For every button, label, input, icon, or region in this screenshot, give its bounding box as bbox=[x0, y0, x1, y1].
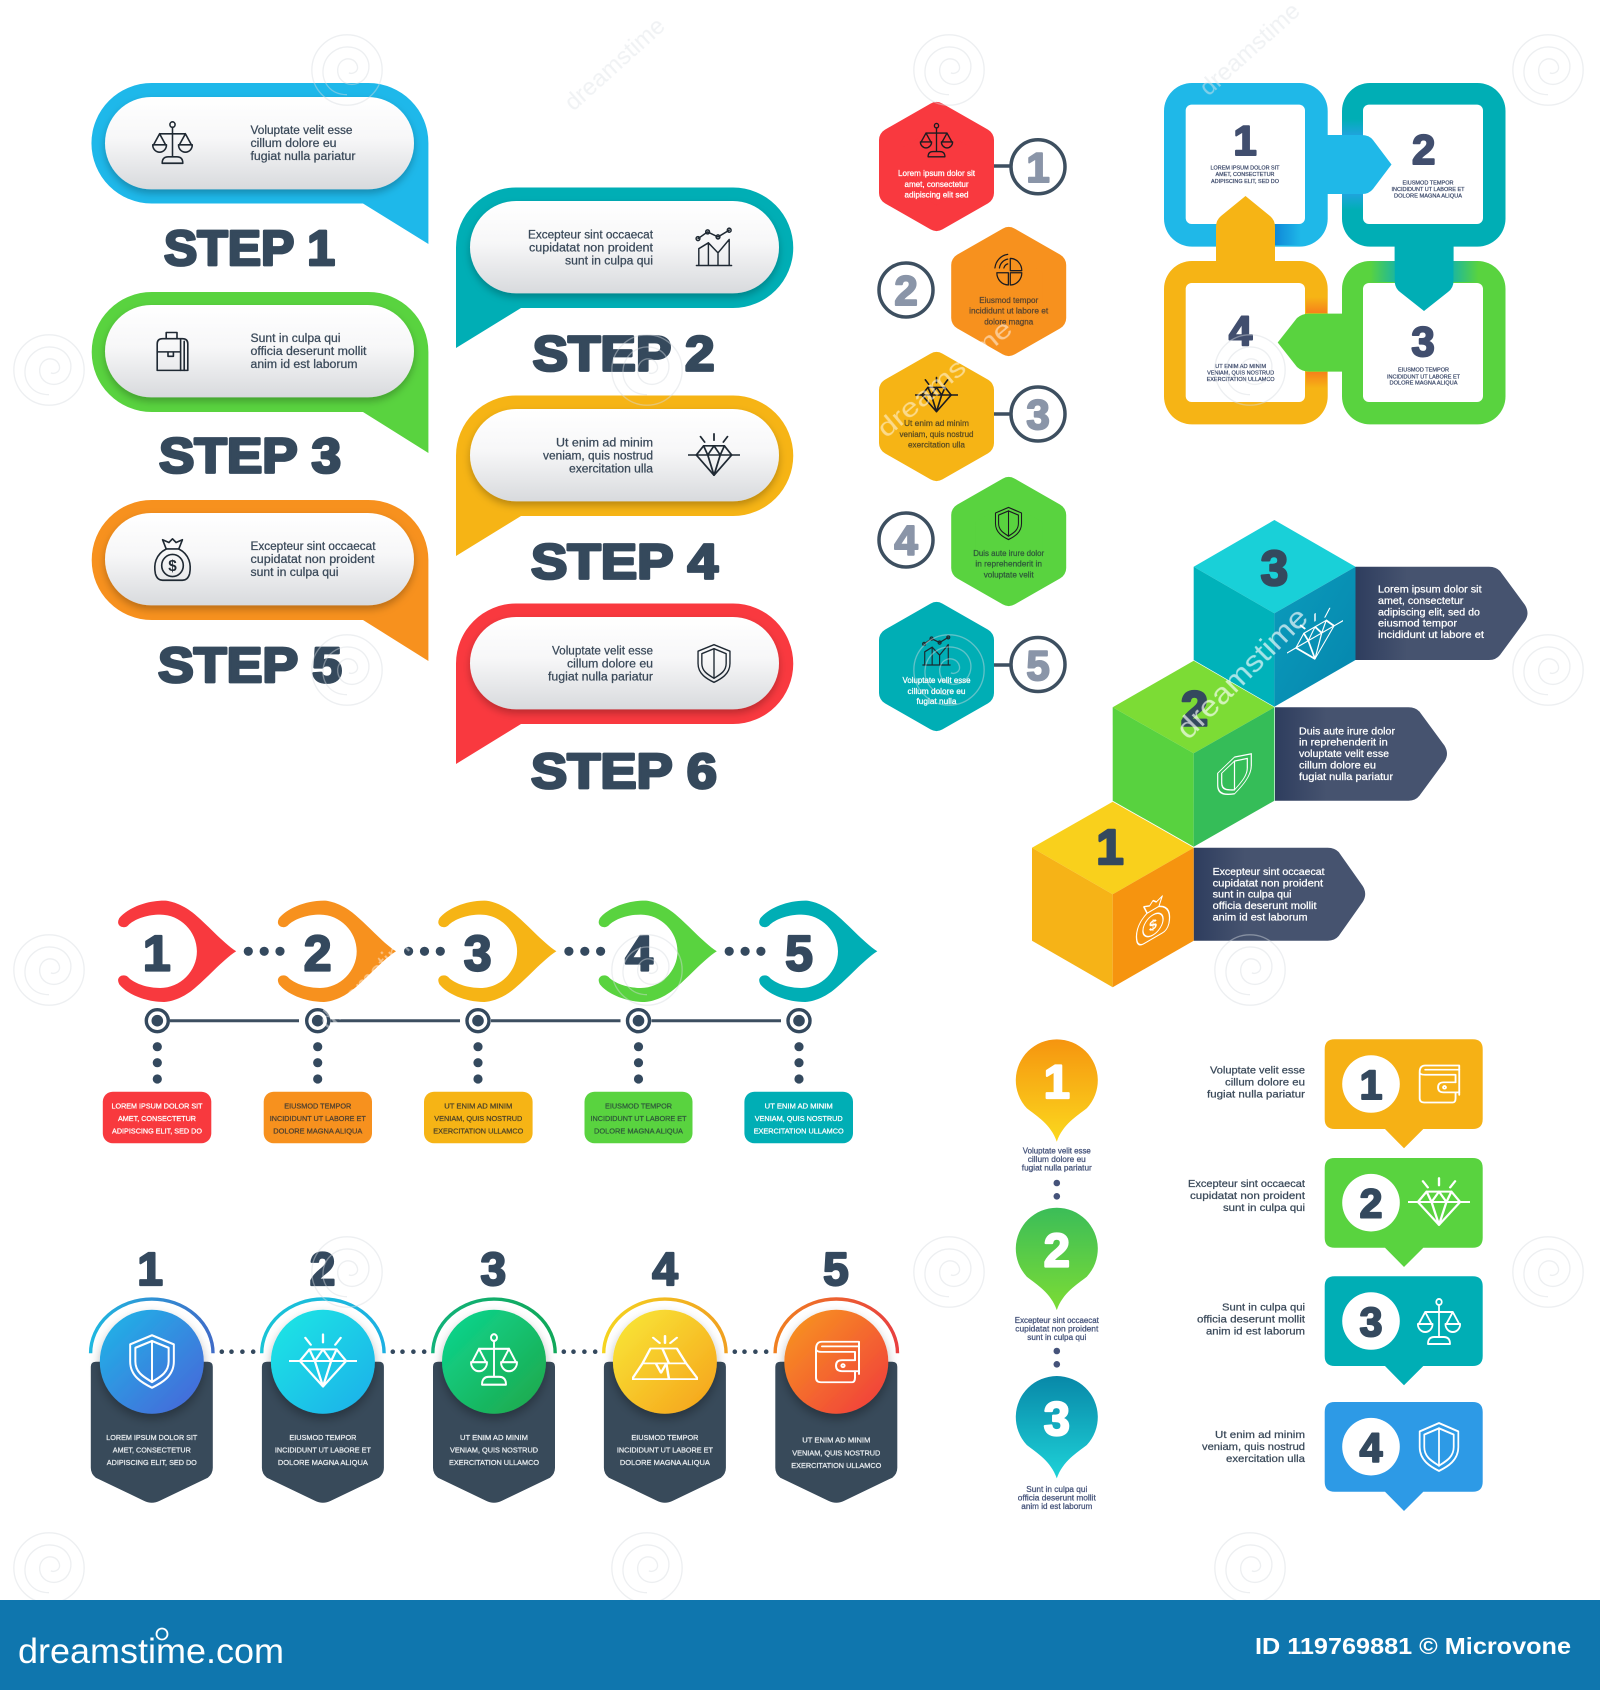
pointer numbers: 4 bbox=[625, 926, 653, 982]
icon: gem bbox=[1408, 1178, 1470, 1225]
text: card 5: VENIAM, QUIS NOSTRUD bbox=[792, 1448, 881, 1457]
icon: scales bbox=[153, 122, 192, 163]
numbers in squares: 4 bbox=[1229, 308, 1253, 354]
pin 2: 2 bbox=[1044, 1224, 1070, 1276]
text: callout 1 bbox=[1207, 1065, 1306, 1100]
pointer 2 bbox=[278, 901, 396, 1002]
footer bar bbox=[0, 1600, 1600, 1690]
hexagon 2 bbox=[963, 239, 1054, 344]
text: card 2: EIUSMOD TEMPOR bbox=[289, 1433, 357, 1442]
ring numbers: 1 bbox=[1026, 144, 1050, 191]
text: hexagon 4: voluptate velit bbox=[984, 570, 1034, 579]
ring numbers: 3 bbox=[1026, 391, 1050, 438]
text: hexagon 3: veniam, quis nostrud bbox=[900, 430, 974, 439]
card 3 bbox=[433, 1299, 555, 1503]
pointer numbers: 5 bbox=[785, 926, 813, 982]
text: square 2: EIUSMOD TEMPOR bbox=[1402, 180, 1454, 186]
timeline box 5: EXERCITATION ULLAMCO bbox=[754, 1126, 844, 1135]
cube 1 bbox=[1032, 802, 1194, 987]
heading: step 2: STEP 2 bbox=[533, 328, 715, 382]
timeline box 2: INCIDIDUNT UT LABORE ET bbox=[270, 1114, 366, 1123]
hexagon 5 bbox=[891, 614, 982, 719]
text: square 1: LOREM IPSUM DOLOR SIT bbox=[1210, 166, 1280, 172]
text: pin 1: Voluptate velit esse bbox=[1023, 1146, 1091, 1155]
text: cube 1 label: officia deserunt mollit bbox=[1213, 900, 1317, 912]
timeline box 4: INCIDIDUNT UT LABORE ET bbox=[590, 1114, 687, 1123]
icon: pie chart bbox=[995, 254, 1022, 285]
pin dots bbox=[1054, 1180, 1060, 1368]
text: callout 1: Voluptate velit esse bbox=[1210, 1065, 1305, 1076]
text: step 5 description: Excepteur sint occaecat bbox=[250, 541, 376, 553]
arrow: yellow to square 1 bbox=[1216, 196, 1275, 261]
timeline box 5: VENIAM, QUIS NOSTRUD bbox=[755, 1114, 843, 1123]
text: card 3: UT ENIM AD MINIM bbox=[460, 1433, 528, 1442]
text: callout 3: anim id est laborum bbox=[1206, 1326, 1305, 1337]
timeline box 2: DOLORE MAGNA ALIQUA bbox=[273, 1126, 362, 1135]
text: card 3: VENIAM, QUIS NOSTRUD bbox=[450, 1446, 539, 1455]
text: step 1 description: cillum dolore eu bbox=[250, 138, 336, 150]
text: card 2: INCIDIDUNT UT LABORE ET bbox=[275, 1446, 371, 1455]
watermark text: dreamstime bbox=[1170, 601, 1315, 746]
square frame 1 bbox=[1164, 83, 1328, 247]
pin 3: 3 bbox=[1044, 1392, 1070, 1445]
watermark text: dreamstime bbox=[559, 12, 671, 116]
text: step 5 description: sunt in culpa qui bbox=[250, 567, 338, 579]
text: hexagon 1: Lorem ipsum dolor sit bbox=[898, 169, 976, 178]
card 4 bbox=[604, 1299, 726, 1503]
text: cube 2 label: in reprehenderit in bbox=[1299, 737, 1388, 749]
text: card 3 bbox=[449, 1433, 539, 1467]
icon: shield bbox=[995, 507, 1022, 540]
hexagon 4 bbox=[963, 489, 1054, 594]
icon: shield bbox=[1420, 1423, 1458, 1471]
watermark text: dreamstime bbox=[1194, 0, 1306, 101]
text: square 3: INCIDIDUNT UT LABORE ET bbox=[1387, 374, 1460, 380]
pointer 3 bbox=[438, 901, 556, 1002]
text: card 4 bbox=[617, 1433, 713, 1467]
text: step 6 description: cillum dolore eu bbox=[567, 658, 653, 670]
text: cube 3 label: amet, consectetur bbox=[1378, 595, 1464, 607]
text: hexagon 5: Voluptate velit esse bbox=[902, 676, 971, 685]
text: hexagon 2 bbox=[969, 296, 1049, 326]
arrow: green to square 4 bbox=[1278, 314, 1342, 372]
text: card 1 bbox=[106, 1433, 198, 1467]
icon: gold bars bbox=[632, 1336, 698, 1379]
timeline line bbox=[170, 1019, 781, 1022]
text: callout 4: Ut enim ad minim bbox=[1215, 1430, 1305, 1441]
bubble: step 1 bbox=[91, 83, 428, 244]
pointer 1 bbox=[118, 901, 236, 1002]
text: callout 1: fugiat nulla pariatur bbox=[1207, 1089, 1306, 1100]
card numbers: 2 bbox=[310, 1243, 335, 1295]
text: hexagon 1: amet, consectetur bbox=[904, 180, 969, 189]
text: pin 2: sunt in culpa qui bbox=[1027, 1333, 1087, 1342]
pointer 5 bbox=[759, 901, 877, 1002]
heading: step 5: STEP 5 bbox=[158, 639, 342, 693]
panel: numbered timeline bbox=[103, 901, 877, 1143]
timeline nodes bbox=[146, 1010, 810, 1032]
text: hexagon 1 bbox=[898, 169, 976, 200]
text: hexagon 3: exercitation ulla bbox=[908, 440, 965, 450]
text: cube 1 label: anim id est laborum bbox=[1213, 911, 1308, 923]
bubble: step 2 bbox=[456, 188, 793, 348]
number 2: 2 bbox=[1181, 682, 1208, 736]
number 3: 3 bbox=[1261, 542, 1288, 596]
callout 3 bbox=[1325, 1276, 1483, 1385]
timeline box 3: EXERCITATION ULLAMCO bbox=[433, 1126, 523, 1135]
text: step 6 description: Voluptate velit esse bbox=[552, 646, 653, 658]
pointer 4 bbox=[599, 901, 717, 1002]
timeline box 3: VENIAM, QUIS NOSTRUD bbox=[434, 1114, 523, 1123]
numbers in squares: 3 bbox=[1411, 318, 1435, 365]
text: card 4: EIUSMOD TEMPOR bbox=[631, 1433, 699, 1442]
text: card 4: INCIDIDUNT UT LABORE ET bbox=[617, 1446, 713, 1455]
text: step 3 description: Sunt in culpa qui bbox=[250, 333, 340, 345]
icon: scales bbox=[471, 1334, 517, 1385]
arrow: blue to square 2 bbox=[1327, 135, 1392, 194]
text: pin 2 bbox=[1015, 1316, 1100, 1342]
text: card 5 bbox=[791, 1436, 881, 1470]
timeline box 2: EIUSMOD TEMPOR bbox=[284, 1102, 352, 1111]
text: hexagon 2: incididunt ut labore et bbox=[969, 307, 1049, 316]
callout 2: 2 bbox=[1360, 1181, 1382, 1227]
panel: isometric cube staircase bbox=[1032, 520, 1528, 987]
pin 2 bbox=[1016, 1208, 1098, 1310]
text: step 2 description: cupidatat non proident bbox=[529, 242, 654, 254]
text: pin 2: cupidatat non proident bbox=[1015, 1325, 1099, 1334]
card numbers: 5 bbox=[823, 1243, 849, 1295]
timeline box 1: LOREM IPSUM DOLOR SIT bbox=[112, 1102, 203, 1111]
pointer numbers bbox=[143, 926, 813, 982]
card 2 bbox=[262, 1299, 384, 1503]
text: step 4 description: veniam, quis nostrud bbox=[543, 450, 653, 462]
callout 4: 4 bbox=[1360, 1425, 1383, 1471]
icon: wallet bbox=[816, 1342, 859, 1382]
footer logo text: dreamstime.com bbox=[18, 1632, 284, 1671]
card numbers bbox=[137, 1243, 849, 1295]
text: card 5: UT ENIM AD MINIM bbox=[802, 1436, 870, 1445]
text: step 2 description: sunt in culpa qui bbox=[565, 256, 653, 268]
text: cube 1 label: Excepteur sint occaecat bbox=[1213, 866, 1325, 878]
text: callout 3: Sunt in culpa qui bbox=[1222, 1302, 1305, 1313]
callout 4 bbox=[1325, 1402, 1483, 1511]
frame shading near arrows bbox=[1275, 119, 1478, 388]
text: cube 2 label: voluptate velit esse bbox=[1299, 748, 1389, 760]
text: step 4 description: exercitation ulla bbox=[569, 464, 654, 476]
card numbers: 4 bbox=[652, 1243, 678, 1295]
text: hexagon 1: adipiscing elit sed bbox=[904, 190, 969, 200]
text: cube 2 label: Duis aute irure dolor bbox=[1299, 725, 1396, 737]
watermark text: dreamstime bbox=[312, 922, 425, 1035]
text: cube 2 label: fugiat nulla pariatur bbox=[1299, 771, 1394, 783]
timeline box 1 bbox=[103, 1092, 211, 1143]
heading: step 1: STEP 1 bbox=[164, 222, 335, 276]
text: cube 2 label: cillum dolore eu bbox=[1299, 759, 1376, 771]
text: callout 2: Excepteur sint occaecat bbox=[1188, 1179, 1305, 1190]
icon: gem bbox=[915, 378, 958, 412]
text: callout 4 bbox=[1202, 1430, 1305, 1465]
text: callout 4: veniam, quis nostrud bbox=[1202, 1442, 1305, 1453]
text: square 4: UT ENIM AD MINIM bbox=[1215, 364, 1266, 370]
connectors and number rings bbox=[879, 140, 1066, 692]
ring numbers: 4 bbox=[894, 517, 918, 564]
text: card 1: ADIPISCING ELIT, SED DO bbox=[107, 1458, 197, 1467]
text: step 4 description bbox=[543, 438, 654, 476]
text: square 4 bbox=[1207, 364, 1275, 383]
panel: hexagon list bbox=[879, 114, 1066, 719]
text: step 5 description: cupidatat non proident bbox=[250, 554, 375, 566]
text: card 1: AMET, CONSECTETUR bbox=[113, 1446, 191, 1455]
watermark text: dreamstime bbox=[871, 313, 1018, 443]
node centers and vertical dots bbox=[152, 1015, 805, 1084]
text: hexagon 2: Eiusmod tempor bbox=[979, 296, 1038, 305]
timeline box 4 bbox=[584, 1092, 692, 1143]
text: hexagon 4 bbox=[973, 549, 1044, 579]
text: pin 1: cillum dolore eu bbox=[1028, 1155, 1086, 1164]
icon: gem bbox=[289, 1334, 357, 1387]
text: card 4: DOLORE MAGNA ALIQUA bbox=[620, 1458, 710, 1467]
text: square 2 bbox=[1392, 180, 1465, 200]
text: callout 4: exercitation ulla bbox=[1226, 1454, 1305, 1465]
text: square 3: DOLORE MAGNA ALIQUA bbox=[1390, 380, 1458, 386]
text: callout 2 bbox=[1188, 1179, 1305, 1214]
text: card 1: LOREM IPSUM DOLOR SIT bbox=[106, 1433, 198, 1442]
numbers in squares: 2 bbox=[1412, 126, 1435, 173]
callout 1 bbox=[1325, 1039, 1483, 1148]
icon: logo spiral bbox=[156, 1628, 168, 1640]
hexagon 3 bbox=[891, 364, 982, 469]
text: hexagon 3: Ut enim ad minim bbox=[904, 419, 969, 428]
watermark text bbox=[312, 0, 1315, 1035]
icon: chart bbox=[696, 228, 732, 265]
text: step 2 description: Excepteur sint occaecat bbox=[528, 230, 654, 242]
text: step 6 description bbox=[548, 646, 653, 684]
text: step 3 description: officia deserunt mollit bbox=[250, 346, 367, 358]
icon: gem bbox=[688, 434, 740, 475]
arrow label: step 3 bbox=[1356, 567, 1528, 660]
icon: shield bbox=[1218, 747, 1251, 804]
icon: shield bbox=[698, 645, 730, 682]
text: pin 1: fugiat nulla pariatur bbox=[1022, 1164, 1092, 1173]
icon: chart bbox=[923, 636, 950, 665]
callout 2 bbox=[1325, 1158, 1483, 1267]
text: cube 3 label: Lorem ipsum dolor sit bbox=[1378, 584, 1482, 596]
text: step 2 description bbox=[528, 230, 654, 268]
pin 3 bbox=[1016, 1376, 1098, 1478]
heading: step 4: STEP 4 bbox=[531, 536, 718, 590]
text: cube 1 label: sunt in culpa qui bbox=[1213, 889, 1292, 901]
panel: map pin list bbox=[1015, 1039, 1100, 1511]
text: cube 1 label: cupidatat non proident bbox=[1213, 877, 1323, 889]
text: card 5: EXERCITATION ULLAMCO bbox=[791, 1461, 881, 1470]
square frame 2 bbox=[1342, 83, 1506, 247]
text: hexagon 2: dolore magna bbox=[984, 317, 1034, 326]
timeline box 1: AMET, CONSECTETUR bbox=[118, 1114, 197, 1123]
bubble: step 3 bbox=[92, 292, 428, 453]
text: step 1 description: Voluptate velit esse bbox=[250, 125, 352, 137]
timeline box 4: DOLORE MAGNA ALIQUA bbox=[594, 1126, 683, 1135]
timeline box 5 bbox=[744, 1092, 853, 1143]
text: card 2 bbox=[275, 1433, 371, 1467]
text: square 2: DOLORE MAGNA ALIQUA bbox=[1394, 194, 1462, 200]
text: hexagon 4: in reprehenderit in bbox=[975, 560, 1042, 569]
text: square 4: EXERCITATION ULLAMCO bbox=[1207, 377, 1275, 383]
cube 2 bbox=[1113, 661, 1274, 847]
timeline box 2 bbox=[264, 1092, 372, 1143]
text: card 2: DOLORE MAGNA ALIQUA bbox=[278, 1458, 368, 1467]
numbers in squares bbox=[1229, 117, 1435, 365]
arrow label: step 2 bbox=[1275, 707, 1447, 801]
bubble: step 4 bbox=[456, 396, 793, 556]
text: hexagon 4: Duis aute irure dolor bbox=[973, 549, 1044, 558]
text: callout 2: cupidatat non proident bbox=[1190, 1191, 1305, 1202]
card numbers: 3 bbox=[481, 1243, 506, 1295]
text: square 1: ADIPISCING ELIT, SED DO bbox=[1211, 179, 1279, 185]
icon: gem bbox=[1287, 598, 1343, 675]
pin 1: 1 bbox=[1044, 1055, 1070, 1108]
text: pin 3 bbox=[1018, 1485, 1097, 1511]
number 1: 1 bbox=[1096, 821, 1124, 875]
text: step 3 description: anim id est laborum bbox=[250, 359, 358, 371]
panel: numbered callouts bbox=[1188, 1039, 1483, 1511]
timeline box 5: UT ENIM AD MINIM bbox=[765, 1102, 833, 1111]
icon: scales bbox=[920, 123, 953, 157]
panel: icon cards row bbox=[91, 1243, 898, 1503]
text: square 1 bbox=[1210, 166, 1280, 185]
hexagon 1 bbox=[891, 114, 982, 219]
footer credit: ID 119769881 © Microvone bbox=[1255, 1633, 1571, 1659]
callout 1: 1 bbox=[1360, 1062, 1382, 1108]
bubble: step 5 bbox=[92, 500, 428, 661]
callout 3: 3 bbox=[1360, 1299, 1382, 1345]
ring numbers: 5 bbox=[1026, 642, 1050, 689]
pin 1 bbox=[1016, 1039, 1098, 1142]
text: callout 2: sunt in culpa qui bbox=[1223, 1203, 1305, 1214]
card numbers: 1 bbox=[137, 1243, 163, 1295]
bubble: step 6 bbox=[456, 604, 793, 764]
ring numbers bbox=[894, 144, 1050, 689]
heading: step 3: STEP 3 bbox=[159, 430, 341, 484]
text: hexagon 5: fugiat nulla bbox=[916, 697, 957, 706]
card 1 bbox=[91, 1299, 213, 1503]
square frame 3 bbox=[1342, 261, 1506, 424]
text: cube 2 label bbox=[1299, 725, 1396, 783]
cube 3 bbox=[1194, 520, 1356, 707]
timeline box 1: ADIPISCING ELIT, SED DO bbox=[112, 1126, 202, 1135]
pointer numbers: 3 bbox=[464, 926, 492, 982]
arrow label: step 1 bbox=[1194, 848, 1365, 941]
text: cube 1 label bbox=[1213, 866, 1325, 923]
text: cube 3 label bbox=[1378, 584, 1484, 641]
text: hexagon 5: cillum dolore eu bbox=[908, 687, 966, 696]
timeline box 3 bbox=[424, 1092, 533, 1143]
text: cube 3 label: eiusmod tempor bbox=[1378, 618, 1458, 630]
text: pin 3: officia deserunt mollit bbox=[1018, 1494, 1097, 1503]
dotted links between cards bbox=[220, 1349, 768, 1354]
text: pin 2: Excepteur sint occaecat bbox=[1015, 1316, 1100, 1325]
text: step 3 description bbox=[250, 333, 367, 371]
icon: shield bbox=[130, 1335, 174, 1388]
text: pin 1 bbox=[1022, 1146, 1092, 1173]
icon: money bag bbox=[1136, 891, 1170, 948]
text: cube 3 label: incididunt ut labore et bbox=[1378, 629, 1484, 641]
timeline box 4: EIUSMOD TEMPOR bbox=[605, 1102, 673, 1111]
panel: step speech bubbles bbox=[91, 83, 793, 799]
text: step 4 description: Ut enim ad minim bbox=[556, 438, 653, 450]
dotted links between pointers bbox=[244, 947, 766, 956]
text: pin 3: Sunt in culpa qui bbox=[1026, 1485, 1088, 1494]
text: step 1 description bbox=[250, 125, 356, 163]
ring numbers: 2 bbox=[894, 267, 918, 314]
text: card 3: EXERCITATION ULLAMCO bbox=[449, 1458, 539, 1467]
text: callout 1: cillum dolore eu bbox=[1225, 1077, 1305, 1088]
heading: step 6: STEP 6 bbox=[531, 745, 717, 799]
timeline box 3: UT ENIM AD MINIM bbox=[444, 1102, 512, 1111]
text: square 3 bbox=[1387, 368, 1460, 386]
numbers in squares: 1 bbox=[1233, 117, 1257, 164]
text: callout 3: officia deserunt mollit bbox=[1197, 1314, 1305, 1325]
text: square 2: INCIDIDUNT UT LABORE ET bbox=[1392, 187, 1465, 193]
icon: wallet bbox=[1420, 1066, 1459, 1102]
panel: linked squares cycle bbox=[1164, 83, 1506, 424]
square frame 4 bbox=[1164, 261, 1328, 424]
icon: briefcase bbox=[157, 333, 188, 370]
text: callout 3 bbox=[1197, 1302, 1305, 1337]
icon: money bag bbox=[155, 539, 190, 580]
text: step 6 description: fugiat nulla pariatur bbox=[548, 672, 653, 684]
inner white panels bbox=[1186, 105, 1483, 402]
text: square 3: EIUSMOD TEMPOR bbox=[1398, 368, 1449, 374]
pointer numbers: 1 bbox=[143, 926, 171, 982]
text: step 1 description: fugiat nulla pariatur bbox=[250, 151, 356, 163]
pointer numbers: 2 bbox=[304, 926, 332, 982]
text: step 5 description bbox=[250, 541, 376, 579]
card 5 bbox=[775, 1299, 898, 1503]
text: square 4: VENIAM, QUIS NOSTRUD bbox=[1207, 370, 1274, 376]
arrow: teal to square 3 bbox=[1395, 246, 1454, 311]
text: hexagon 3 bbox=[900, 419, 974, 450]
text: square 1: AMET, CONSECTETUR bbox=[1216, 172, 1274, 178]
text: hexagon 5 bbox=[902, 676, 971, 706]
text: pin 3: anim id est laborum bbox=[1021, 1502, 1092, 1511]
text: cube 3 label: adipiscing elit, sed do bbox=[1378, 606, 1480, 618]
icon: scales bbox=[1418, 1299, 1460, 1344]
